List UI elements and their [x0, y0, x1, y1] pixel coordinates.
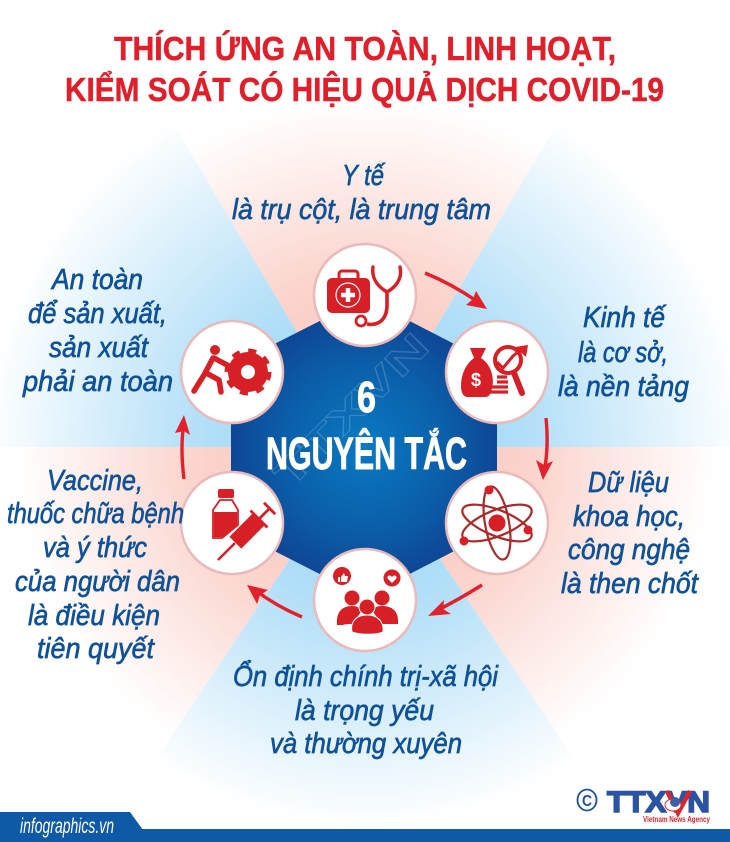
label: Dữ liệu: công nghệ [568, 534, 690, 566]
label: Kinh tế: là nền tảng [558, 371, 689, 403]
label: Dữ liệu: khoa học, [573, 501, 685, 533]
title: THÍCH ỨNG AN TOÀN, LINH HOẠT, [114, 30, 616, 67]
label: Vaccine: là điều kiện [28, 600, 160, 632]
icon circle: economy: $ [471, 370, 481, 390]
TTXVN logo: TTXVN [607, 786, 710, 819]
icon circle: data, science, technology [446, 472, 548, 574]
icon circle: safety [181, 321, 283, 423]
label: Dữ liệu: Dữ liệu [588, 467, 669, 499]
label: Y tế: Y tế [342, 160, 386, 192]
label: Kinh tế: Kinh tế [583, 302, 667, 334]
label: Kinh tế: là cơ sở, [578, 337, 668, 369]
label: Dữ liệu: là then chốt [561, 568, 700, 600]
label: An toàn: An toàn [50, 264, 143, 296]
icon circle: vaccine [181, 472, 283, 574]
icon circle: medical [314, 244, 416, 346]
center text: 6 nguyên tắc [266, 373, 467, 479]
label: An toàn: để sản xuất, [28, 298, 167, 330]
TTXVN logo [578, 786, 710, 824]
icon circle: economy [446, 321, 548, 423]
footer bar [0, 812, 730, 842]
TTXVN logo: Vietnam News Agency [643, 815, 710, 824]
label: Vaccine: tiên quyết [37, 633, 156, 665]
label: Y tế: là trụ cột, là trung tâm [232, 194, 491, 226]
title: KIỂM SOÁT CÓ HIỆU QUẢ DỊCH COVID-19 [65, 71, 664, 108]
central hexagon [231, 298, 497, 597]
label: Ổn định: và thường xuyên [270, 728, 462, 760]
label: Ổn định: Ổn định chính trị-xã hội [233, 659, 499, 693]
TTXVN logo: C [582, 793, 592, 810]
center text: 6 nguyên tắc: 6 [357, 373, 376, 422]
label: Vaccine [7, 465, 184, 665]
label: Kinh tế [558, 302, 689, 403]
label: An toàn: phải an toàn [22, 366, 173, 398]
label: Vaccine: Vaccine, [47, 465, 143, 497]
icon circle: people [314, 549, 416, 651]
label: Vaccine: của người dân [15, 566, 180, 598]
label: Ổn định [233, 659, 499, 760]
arrows between circles [175, 273, 553, 617]
label: An toàn: sản xuất [49, 332, 150, 364]
label: Dữ liệu [561, 467, 700, 600]
label: An toàn [22, 264, 173, 398]
watermark: TTXVN [267, 325, 438, 496]
title [65, 30, 664, 108]
label: Vaccine: và ý thức [43, 532, 147, 564]
center text: 6 nguyên tắc: NGUYÊN TẮC [266, 428, 467, 479]
label: Vaccine: thuốc chữa bệnh [7, 498, 184, 530]
label: Ổn định: là trọng yếu [295, 695, 434, 727]
label: Y tế [232, 160, 491, 226]
footer source text: infographics.vn [20, 815, 114, 838]
